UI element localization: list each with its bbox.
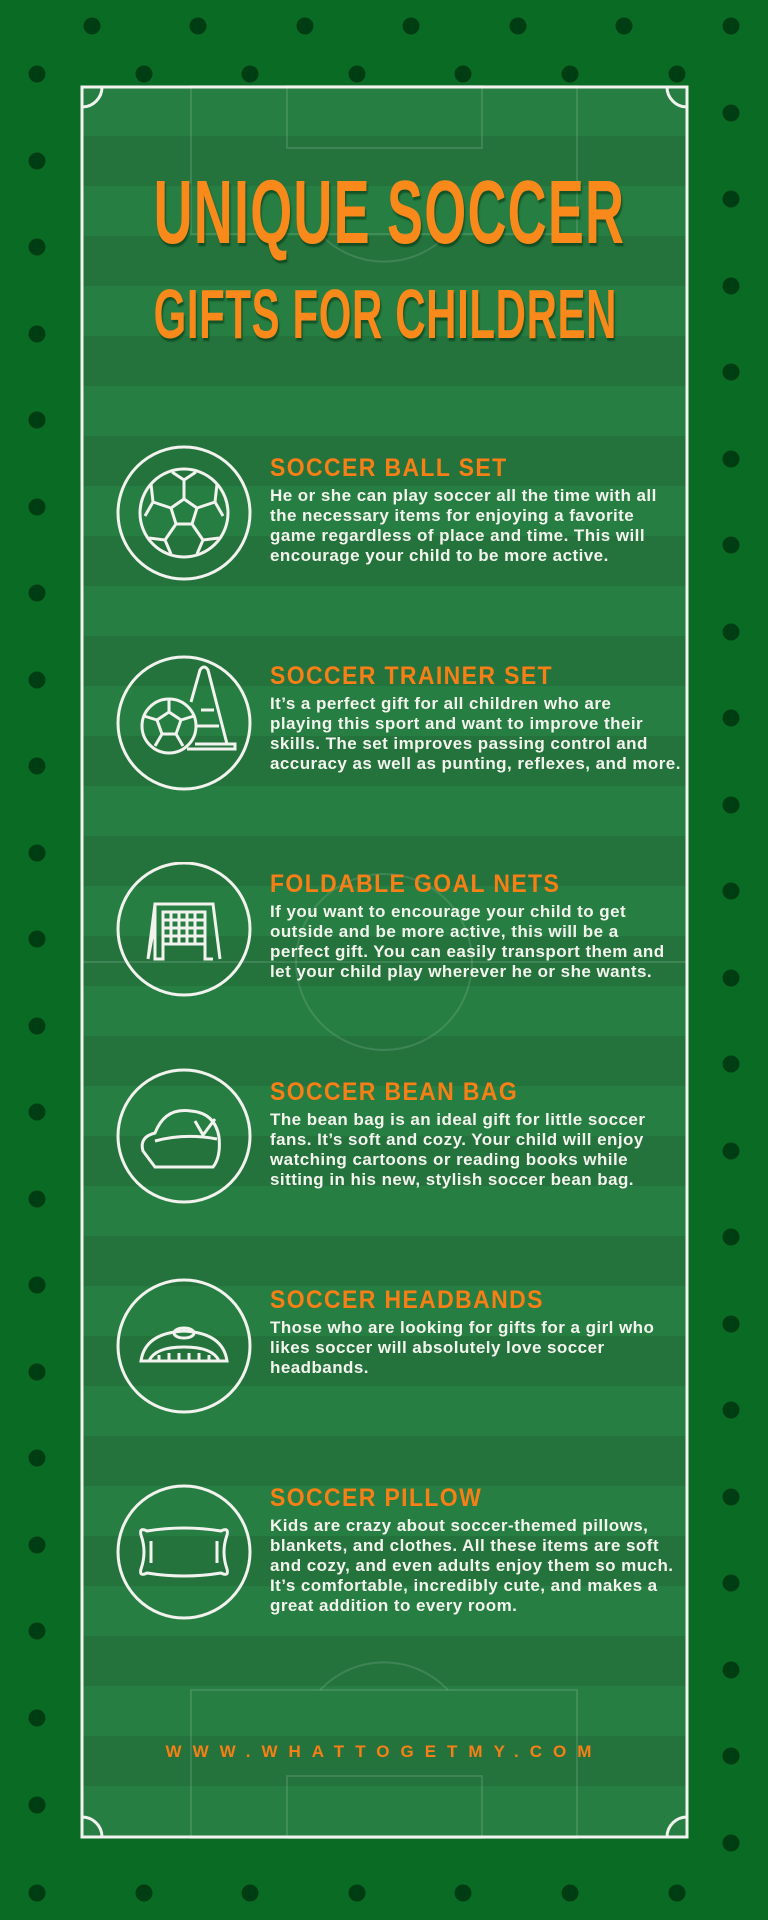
item: bean bag (270, 1078, 645, 1189)
item: trainer set (270, 662, 681, 773)
item: pillow: blankets, and clothes. All these items are soft (270, 1536, 659, 1555)
item: trainer set: SOCCER TRAINER SET (270, 662, 553, 690)
item: soccer ball set: He or she can play soccer all the time with all (270, 486, 657, 505)
title: UNIQUE SOCCER (154, 163, 625, 263)
item: trainer set: It’s a perfect gift for all children who are (270, 694, 611, 713)
item: trainer set: accuracy as well as punting, reflexes, and more. (270, 754, 681, 773)
item: soccer ball set (270, 454, 657, 565)
item: goal nets: FOLDABLE GOAL NETS (270, 870, 560, 898)
item: bean bag: The bean bag is an ideal gift for little soccer (270, 1110, 645, 1129)
item: goal nets (270, 870, 665, 981)
item: headbands (270, 1286, 654, 1377)
item: pillow: and cozy, and even adults enjoy them so much. (270, 1556, 673, 1575)
item: goal nets: outside and be more active, this will be a (270, 922, 619, 941)
item: pillow: great addition to every room. (270, 1596, 517, 1615)
title (154, 163, 625, 353)
item: headbands: SOCCER HEADBANDS (270, 1286, 544, 1314)
item: soccer ball set: game regardless of place and time. This will (270, 526, 645, 545)
item: headbands: Those who are looking for gifts for a girl who (270, 1318, 654, 1337)
footer url: WWW.WHATTOGETMY.COM (166, 1742, 602, 1761)
icon: headband (116, 1278, 252, 1414)
item: headbands: likes soccer will absolutely love soccer (270, 1338, 605, 1357)
icon: trainer set (116, 656, 252, 790)
title: GIFTS FOR CHILDREN (154, 275, 617, 353)
item: goal nets: perfect gift. You can easily transport them and (270, 942, 665, 961)
icon: goal net (116, 862, 252, 996)
icon: bean bag (116, 1068, 252, 1204)
item: bean bag: SOCCER BEAN BAG (270, 1078, 518, 1106)
icon: soccer ball (116, 446, 252, 580)
item: bean bag: fans. It’s soft and cozy. Your child will enjoy (270, 1130, 644, 1149)
item: headbands: headbands. (270, 1358, 369, 1377)
item: goal nets: let your child play wherever he or she wants. (270, 962, 652, 981)
item: pillow: It’s comfortable, incredibly cute, and makes a (270, 1576, 658, 1595)
item: soccer ball set: the necessary items for enjoying a favorite (270, 506, 634, 525)
icon: pillow (116, 1484, 252, 1620)
item: pillow: SOCCER PILLOW (270, 1484, 482, 1512)
item: trainer set: skills. The set improves passing control and (270, 734, 648, 753)
item: pillow: Kids are crazy about soccer-themed pillows, (270, 1516, 648, 1535)
item: bean bag: sitting in his new, stylish soccer bean bag. (270, 1170, 634, 1189)
item: soccer ball set: encourage your child to be more active. (270, 546, 609, 565)
item: trainer set: playing this sport and want to improve their (270, 714, 643, 733)
item: pillow (270, 1484, 673, 1615)
item: goal nets: If you want to encourage your child to get (270, 902, 626, 921)
item: soccer ball set: SOCCER BALL SET (270, 454, 508, 482)
item: bean bag: watching cartoons or reading books while (270, 1150, 628, 1169)
